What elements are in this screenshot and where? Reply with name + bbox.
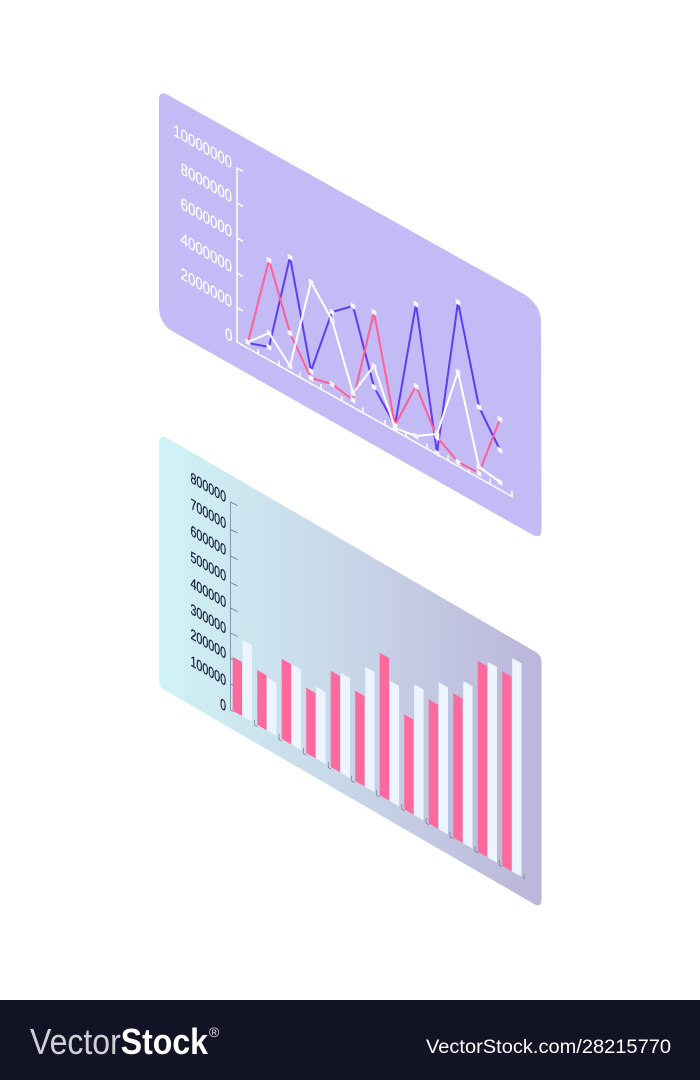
y axis labels: bar chart: 600000 [190,522,226,559]
line series: white [248,282,500,482]
y axis labels: line chart: 10000000 [173,122,232,173]
y axis labels: bar chart: 500000 [190,548,226,585]
y axis labels: bar chart: 800000 [190,469,226,506]
panel background: gradient [159,437,542,905]
data point markers [246,254,502,485]
line series: pink [248,260,500,473]
panel: bar chart [159,437,542,905]
y axis labels: line chart: 2000000 [181,265,232,312]
y axis labels: line chart [173,122,233,347]
footer registered mark: ® [209,1024,220,1040]
panel background: purple [159,93,542,536]
y axis labels: bar chart: 300000 [190,600,226,637]
y axis labels: bar chart: 200000 [190,625,226,662]
y axis labels: bar chart: 400000 [190,574,226,611]
y axis labels: bar chart: 0 [220,695,226,715]
y axis labels: bar chart: 700000 [190,495,226,532]
y axis labels: line chart: 0 [225,325,233,347]
bars: white series [243,640,521,877]
footer band [0,1000,700,1080]
y axis labels: line chart: 6000000 [181,195,232,242]
y axis labels: bar chart [190,469,226,715]
footer logo: VectorStock: VectorStock [30,1021,209,1062]
footer background [0,1000,700,1080]
y axis labels: line chart: 4000000 [181,230,232,277]
y axis labels: bar chart: 100000 [190,652,226,689]
y axis labels: line chart: 8000000 [181,160,232,207]
y axis and tick marks: bar chart [230,502,524,879]
panel: line chart [159,93,542,536]
line series: purple [248,257,500,453]
footer image id: VectorStock.com/28215770 [426,1037,671,1058]
bars: pink series [233,653,511,871]
axes and tick marks: line chart [237,168,512,496]
